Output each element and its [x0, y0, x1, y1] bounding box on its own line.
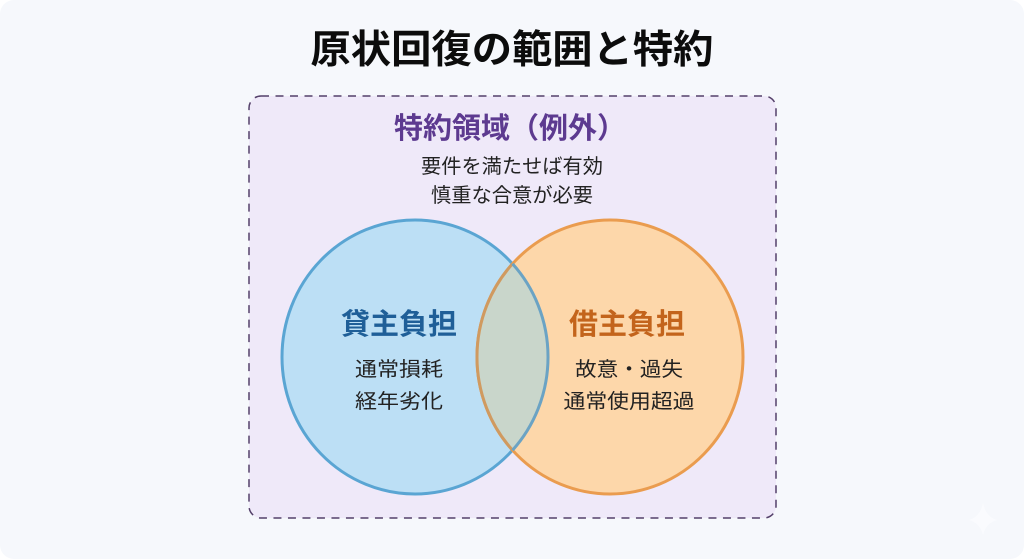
circle: landlord burden [282, 220, 548, 494]
circle: tenant burden [477, 220, 743, 494]
text block: landlord burden items: 経年劣化 [355, 390, 443, 413]
overlap edge: landlord circle [512, 264, 548, 450]
text block: tenant burden items [564, 358, 694, 413]
venn diagram [282, 220, 743, 494]
text block: tenant burden items: 通常使用超過 [564, 390, 694, 413]
heading: tenant burden: 借主負担 [569, 308, 685, 341]
text block: special-terms description: 要件を満たせば有効 [421, 155, 603, 178]
text block: landlord burden items: 通常損耗 [355, 358, 443, 381]
text block: landlord burden items [355, 358, 443, 413]
text block: special-terms description: 慎重な合意が必要 [431, 184, 593, 207]
heading: landlord burden: 貸主負担 [341, 308, 457, 341]
text block: tenant burden items: 故意・過失 [575, 358, 683, 381]
icon: faint sparkle [969, 503, 997, 535]
heading: special-terms area: 特約領域（例外） [394, 112, 626, 145]
text block: special-terms description [421, 155, 603, 207]
overlap region [477, 264, 548, 450]
panel: special-terms area [249, 96, 776, 518]
overlap edge: tenant circle [477, 264, 512, 450]
title: 原状回復の範囲と特約 [310, 29, 714, 72]
